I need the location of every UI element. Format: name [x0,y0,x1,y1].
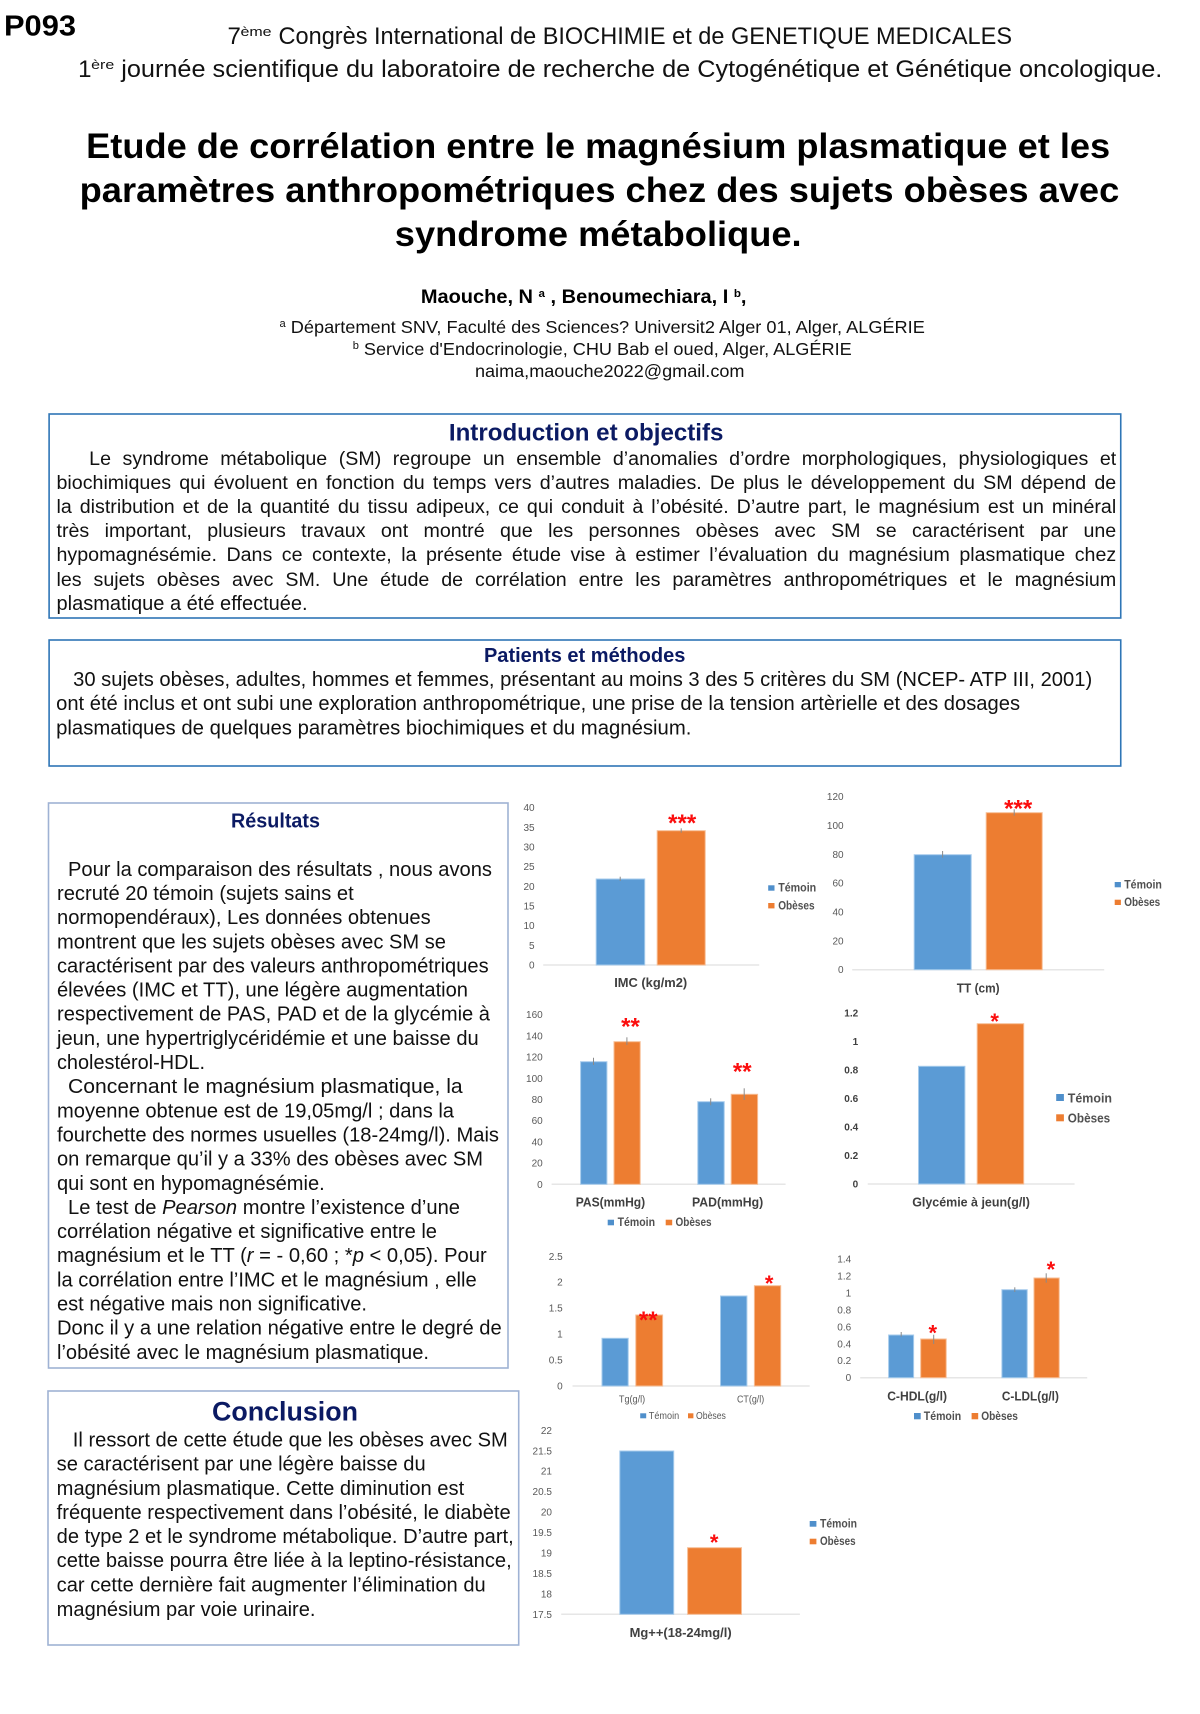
axis label: Mg++(18-24mg/l) [630,1625,732,1640]
text block: conclusion body: car cette dernière fait augmenter l’élimination du [57,1574,486,1596]
y axis labels: 0 [557,1382,563,1392]
affiliations: a [280,318,287,330]
y axis labels: 2.5 [549,1252,563,1263]
y axis labels: 18 [541,1589,552,1600]
significance stars [639,1271,774,1334]
legend: Témoin [1124,879,1162,891]
bar chart: TT [827,792,1162,995]
y axis labels: 0.6 [837,1322,852,1333]
y axis labels: 20.5 [533,1487,552,1498]
legend: Témoin [924,1411,961,1423]
significance stars [621,1014,752,1085]
y axis labels: 5 [529,941,535,952]
text block: résultats body: cholestérol-HDL. [57,1052,205,1074]
legend: Témoin [778,883,816,895]
legend [640,1411,726,1422]
y axis labels: 0.8 [844,1066,859,1076]
axis labels [576,1195,763,1210]
authors: Maouche, N [421,287,528,308]
affiliations: Service d'Endocrinologie, CHU Bab el oued, Alger, ALGÉRIE [359,339,852,359]
legend: Témoin [820,1518,857,1530]
text block: conclusion body: de type 2 et le syndrome métabolique. D’autre part, [57,1526,514,1548]
text block: résultats body: élevées (IMC et TT), une légère augmentation [57,980,468,1002]
affiliations: naima,maouche2022@gmail.com [475,361,744,381]
y axis labels: 20 [541,1508,552,1519]
y axis labels: 0.5 [549,1356,563,1367]
text block: introduction body: biochimiques qui évoluent en fonction du temps vers d’autres maladies. De plus le développement du SM dépend de [57,472,1116,494]
text block: patients body: 30 sujets obèses, adultes, hommes et femmes, présentant au moins 3 des 5 critères du SM (NCEP- ATP III, 2001) [73,669,1092,691]
legend [608,1217,712,1229]
text block: résultats body: Concernant le magnésium plasmatique, la [68,1076,464,1098]
y axis labels: 120 [526,1053,543,1064]
y axis labels: 20 [832,936,844,947]
y axis labels: 0.2 [837,1356,852,1367]
panel: introduction et objectifs [49,414,1121,618]
significance stars: ** [733,1058,752,1085]
y axis labels: 18.5 [533,1569,552,1580]
affiliations [280,317,925,381]
affiliations: b [353,340,359,352]
text block: introduction body: Le syndrome métabolique (SM) regroupe un ensemble d’anomalies d’ordre morphologiques, physiologiques et [89,448,1116,470]
y axis labels: 0 [846,1373,852,1384]
text block: conclusion body: magnésium plasmatique. Cette diminution est [57,1478,465,1500]
text block: résultats body: jeun, une hypertriglycéridémie et une baisse du [56,1028,479,1050]
y axis labels: 80 [832,850,844,861]
y axis labels: 0.4 [844,1122,859,1134]
legend: Obèses [696,1411,726,1422]
axis labels [887,1389,1059,1404]
y axis labels: 40 [523,803,535,814]
congress header: ème [240,24,272,39]
congress header [78,23,1162,83]
authors: , [741,287,746,308]
y axis labels: 35 [523,823,535,834]
text block: résultats body: corrélation négative et significative entre le [57,1221,437,1243]
y axis labels: 2 [557,1278,563,1289]
y axis labels: 0 [838,965,844,976]
axis labels: C-HDL(g/l) [887,1389,947,1404]
bars [581,1037,758,1184]
congress header: 1 [78,56,92,83]
text block: résultats body: respectivement de PAS, PAD et de la glycémie à [57,1004,491,1026]
significance stars: ** [639,1307,658,1334]
bar chart: IMC [523,803,816,990]
y axis labels: 25 [523,862,535,873]
legend: Obèses [1068,1110,1110,1125]
panel: conclusion [48,1391,519,1645]
y axis labels: 1 [557,1330,563,1341]
y axis labels: 0.2 [844,1151,859,1162]
panel: patients et méthodes [49,640,1121,766]
bar chart: PAS and PAD [526,1010,786,1229]
significance stars: * [765,1271,774,1296]
y axis labels: 22 [541,1426,552,1437]
axis labels: PAD(mmHg) [692,1195,763,1210]
y axis labels: 17.5 [533,1610,552,1621]
significance stars [929,1257,1056,1346]
y axis labels: 0 [853,1180,859,1190]
y axis labels: 160 [526,1010,543,1021]
text block: résultats body: fourchette des normes usuelles (18-24mg/l). Mais [57,1124,499,1146]
congress header: journée scientifique du laboratoire de recherche de Cytogénétique et Génétique oncologique. [120,56,1162,83]
y axis labels: 1.2 [837,1271,852,1282]
y axis labels: 1.5 [549,1304,563,1315]
text block: résultats body: qui sont en hypomagnésémie. [57,1173,325,1195]
axis label: Glycémie à jeun(g/l) [912,1195,1030,1210]
y axis labels: 1 [853,1037,859,1048]
text block: conclusion body [57,1429,514,1621]
bars [620,1451,742,1614]
heading: introduction: Introduction et objectifs [449,420,723,446]
y axis labels: 40 [832,908,844,918]
significance stars: ** [621,1014,640,1040]
title [80,127,1119,254]
y axis labels: 19.5 [533,1528,552,1539]
text block: conclusion body: fréquente respectivement dans l’obésité, le diabète [57,1502,511,1524]
legend: Obèses [820,1536,856,1548]
y axis labels: 21 [541,1467,552,1478]
y axis labels: 1.2 [844,1008,859,1020]
text block: conclusion body: Il ressort de cette étude que les obèses avec SM [73,1429,508,1451]
text block: résultats body: l’obésité avec le magnésium plasmatique. [57,1342,429,1364]
y axis labels: 15 [523,902,535,912]
axis label: TT (cm) [957,980,1000,995]
bars [596,828,705,965]
y axis labels: 1 [846,1288,852,1299]
text block: résultats body: caractérisent par des valeurs anthropométriques [57,955,489,977]
y axis labels: 20 [532,1159,543,1170]
bars [602,1286,781,1386]
text block: résultats body: normopendéraux), Les données obtenues [57,907,431,929]
bars [918,1024,1024,1184]
legend: Témoin [618,1217,655,1229]
poster number: P093 [4,10,76,42]
y axis labels: 0.6 [844,1094,859,1105]
axis labels: CT(g/l) [737,1394,764,1405]
legend [1056,1090,1112,1125]
text block: résultats body: magnésium et le TT (r = - 0,60 ; *p < 0,05). Pour [57,1245,487,1267]
y axis labels: 0 [529,960,535,972]
axis labels: C-LDL(g/l) [1002,1389,1059,1404]
legend [768,883,816,912]
y axis labels: 100 [827,821,844,832]
text block: patients body: plasmatiques de quelques paramètres biochimiques et du magnésium. [56,718,691,739]
affiliations: Département SNV, Faculté des Sciences? Universit2 Alger 01, Alger, ALGÉRIE [286,317,925,337]
axis labels: PAS(mmHg) [576,1195,645,1210]
text block: résultats body: on remarque qu’il y a 33% des obèses avec SM [57,1149,483,1171]
y axis labels: 20 [523,882,535,893]
bars [914,809,1042,970]
legend [810,1518,857,1548]
heading: conclusion: Conclusion [212,1397,358,1427]
text block: patients body [56,669,1092,739]
bar chart: glycémie à jeun [844,1008,1112,1210]
bar chart: Tg and CT [549,1252,810,1422]
y axis labels: 21.5 [533,1446,552,1457]
axis label: IMC (kg/m2) [614,975,687,990]
y axis labels: 0.8 [837,1305,852,1316]
congress header: ère [91,57,114,72]
text block: introduction body: la distribution et de la quantité du tissu adipeux, ce qui conduit à l’obésité. D’autre part, le magnésium est un minéral [57,496,1116,518]
y axis labels: 80 [532,1095,543,1106]
significance stars: *** [1004,796,1033,822]
text block: résultats body: moyenne obtenue est de 19,05mg/l ; dans la [57,1100,455,1122]
authors: a [539,288,546,300]
axis labels [619,1394,764,1405]
text block: résultats body: Pour la comparaison des résultats , nous avons [68,859,492,881]
significance star: * [990,1009,999,1034]
text block: résultats body [56,859,502,1364]
y axis labels: 30 [523,842,535,854]
authors: b [734,288,741,300]
legend: Obèses [1124,897,1160,909]
title: paramètres anthropométriques chez des sujets obèses avec [80,171,1119,210]
y axis labels: 100 [526,1074,543,1085]
legend: Témoin [1068,1090,1112,1105]
text block: résultats body: recruté 20 témoin (sujets sains et [57,883,354,905]
axis labels: Tg(g/l) [619,1394,645,1405]
significance stars: * [1047,1257,1056,1282]
legend [1115,879,1162,909]
y axis labels: 140 [526,1031,543,1042]
text block: résultats body: Le test de Pearson montre l’existence d’une [68,1197,460,1219]
y axis labels: 120 [827,792,844,803]
text block: patients body: ont été inclus et ont subi une exploration anthropométrique, une prise de la tension artèrielle et des dosages [56,693,1020,715]
legend [914,1411,1018,1423]
y axis labels: 60 [832,879,844,890]
significance stars: * [929,1320,938,1346]
y axis labels: 40 [532,1137,543,1148]
y axis labels: 10 [523,921,535,932]
legend: Obèses [778,900,815,912]
y axis labels: 1.4 [837,1254,852,1266]
congress header: 7 [227,23,241,50]
title: Etude de corrélation entre le magnésium plasmatique et les [86,127,1110,166]
bar chart: C-HDL and C-LDL [837,1254,1087,1423]
congress header: Congrès International de BIOCHIMIE et de GENETIQUE MEDICALES [279,23,1012,50]
text block: résultats body: est négative mais non significative. [57,1294,367,1316]
text block: résultats body: montrent que les sujets obèses avec SM se [57,931,446,953]
y axis labels: 19 [541,1548,552,1560]
text block: introduction body: très important, plusieurs travaux ont montré que les personnes obèses avec SM se caractérisent par une [57,520,1116,542]
text block: introduction body [57,447,1116,615]
text block: conclusion body: se caractérisent par une légère baisse du [57,1454,426,1476]
panel: résultats [48,803,508,1368]
text block: conclusion body: magnésium par voie urinaire. [57,1599,315,1621]
heading: patients et méthodes: Patients et méthodes [484,645,685,667]
legend: Témoin [649,1411,679,1422]
text block: introduction body: les sujets obèses avec SM. Une étude de corrélation entre les paramètres anthropométriques et le magnésium [57,568,1116,590]
y axis labels: 0 [537,1180,543,1191]
bar chart: Mg++ [533,1426,857,1640]
legend: Obèses [981,1411,1018,1423]
significance star: * [710,1530,719,1555]
bars [889,1273,1059,1378]
authors: , Benoumechiara, I [545,287,734,308]
text block: conclusion body: cette baisse pourra être liée à la leptino-résistance, [57,1550,512,1572]
significance stars: *** [668,810,697,837]
text block: introduction body: plasmatique a été effectuée. [57,593,308,615]
text block: introduction body: hypomagnésémie. Dans ce contexte, la présente étude vise à estimer l’évaluation du magnésium plasmatique chez [57,544,1116,566]
text block: résultats body: la corrélation entre l’IMC et le magnésium , elle [57,1269,477,1291]
text block: résultats body: Donc il y a une relation négative entre le degré de [57,1318,502,1340]
y axis labels: 0.4 [837,1339,852,1350]
heading: résultats: Résultats [231,811,320,833]
legend: Obèses [675,1217,712,1229]
title: syndrome métabolique. [395,215,802,254]
y axis labels: 60 [532,1116,543,1127]
